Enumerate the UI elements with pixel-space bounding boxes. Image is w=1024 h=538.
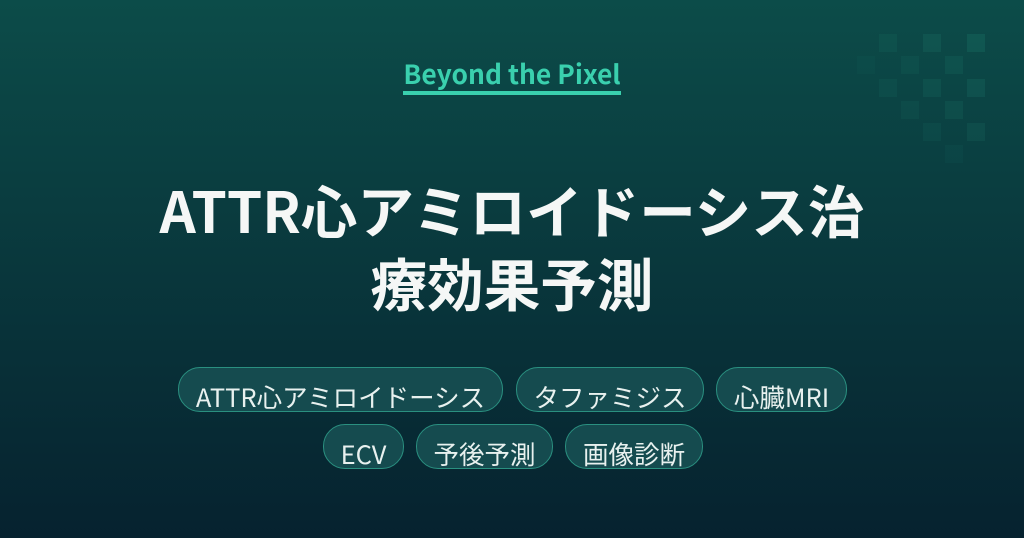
title: 療効果予測 — [371, 241, 653, 323]
tag: タファミジス: タファミジス — [533, 378, 686, 415]
tag: 画像診断 — [565, 424, 703, 469]
brand label: Beyond the Pixel: Beyond the Pixel — [403, 53, 621, 92]
tag: ECV: ECV — [341, 435, 386, 472]
tag: 予後予測: 予後予測 — [433, 435, 536, 472]
title — [159, 168, 864, 323]
tag: 心臓MRI: 心臓MRI — [734, 378, 829, 415]
tag: タファミジス — [516, 367, 704, 412]
tags — [178, 367, 847, 472]
tag: 心臓MRI — [716, 367, 847, 412]
tag: 画像診断: 画像診断 — [583, 435, 685, 472]
title: ATTR心アミロイドーシス治 — [160, 168, 864, 250]
decorative pixel grid icon — [923, 34, 985, 141]
tag: ECV — [323, 424, 404, 469]
tag: ATTR心アミロイドーシス: ATTR心アミロイドーシス — [196, 378, 485, 415]
tag: ATTR心アミロイドーシス — [178, 367, 503, 412]
tag: 予後予測 — [416, 424, 553, 469]
